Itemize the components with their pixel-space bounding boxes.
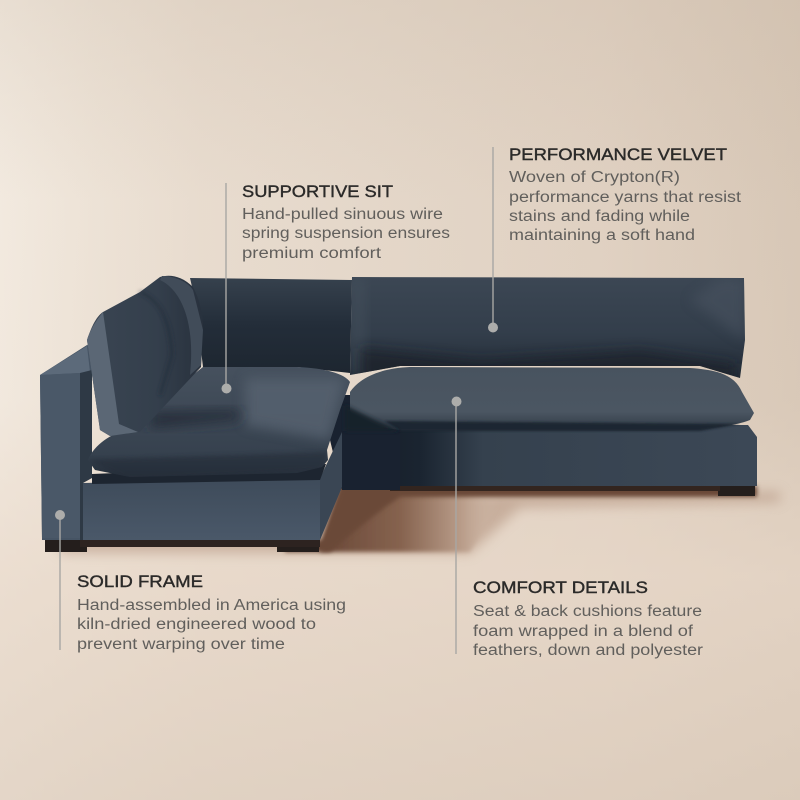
feature: comfort details: foam wrapped in a blend of (473, 623, 694, 640)
feature: performance velvet (488, 145, 742, 332)
feature: solid frame (55, 510, 346, 653)
feature: comfort details: feathers, down and polyester (473, 642, 703, 659)
left side: base (83, 432, 342, 540)
right base (335, 425, 757, 486)
seat cushion: right (345, 367, 754, 431)
feature: solid frame: SOLID FRAME (77, 572, 203, 591)
feature: solid frame: Hand-assembled in America using (77, 597, 346, 614)
feature: supportive sit: Hand-pulled sinuous wire (242, 206, 443, 223)
feature: performance velvet: Woven of Crypton(R) (509, 169, 680, 186)
back cushion: center corner (190, 278, 352, 373)
feature: solid frame: prevent warping over time (77, 636, 285, 653)
feature: supportive sit (222, 182, 450, 394)
feature: supportive sit: spring suspension ensures (242, 225, 450, 242)
feature: performance velvet: stains and fading while (509, 208, 690, 225)
feature: performance velvet: PERFORMANCE VELVET (509, 145, 727, 164)
feet (45, 484, 755, 552)
feature: supportive sit: premium comfort (242, 245, 382, 262)
left side: arm (40, 345, 100, 540)
feature: supportive sit: SUPPORTIVE SIT (242, 182, 393, 201)
feature: solid frame: kiln-dried engineered wood to (77, 616, 316, 633)
feature: performance velvet: performance yarns that resist (509, 189, 742, 206)
feature: comfort details: COMFORT DETAILS (473, 578, 648, 597)
feature: performance velvet: maintaining a soft hand (509, 227, 695, 244)
seat cushion: left (88, 367, 350, 480)
sofa: L-shaped sectional in navy velvet (40, 276, 780, 553)
floor shadow (60, 486, 780, 553)
feature: comfort details: Seat & back cushions feature (473, 603, 702, 620)
center corner dark (315, 395, 400, 490)
back cushion: right (350, 276, 745, 385)
back cushion: left side (87, 276, 203, 436)
feature: comfort details (452, 396, 703, 659)
